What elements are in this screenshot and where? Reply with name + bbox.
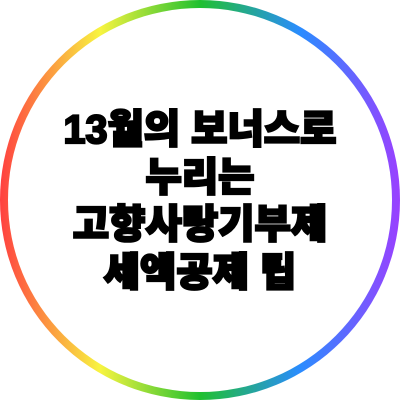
title line 2: 누리는 — [145, 156, 255, 200]
title line 4: 세액공제 팁 — [104, 251, 296, 295]
title line 1: 13월의 보너스로 — [64, 108, 336, 152]
title line 3: 고향사랑기부제 — [73, 203, 327, 247]
